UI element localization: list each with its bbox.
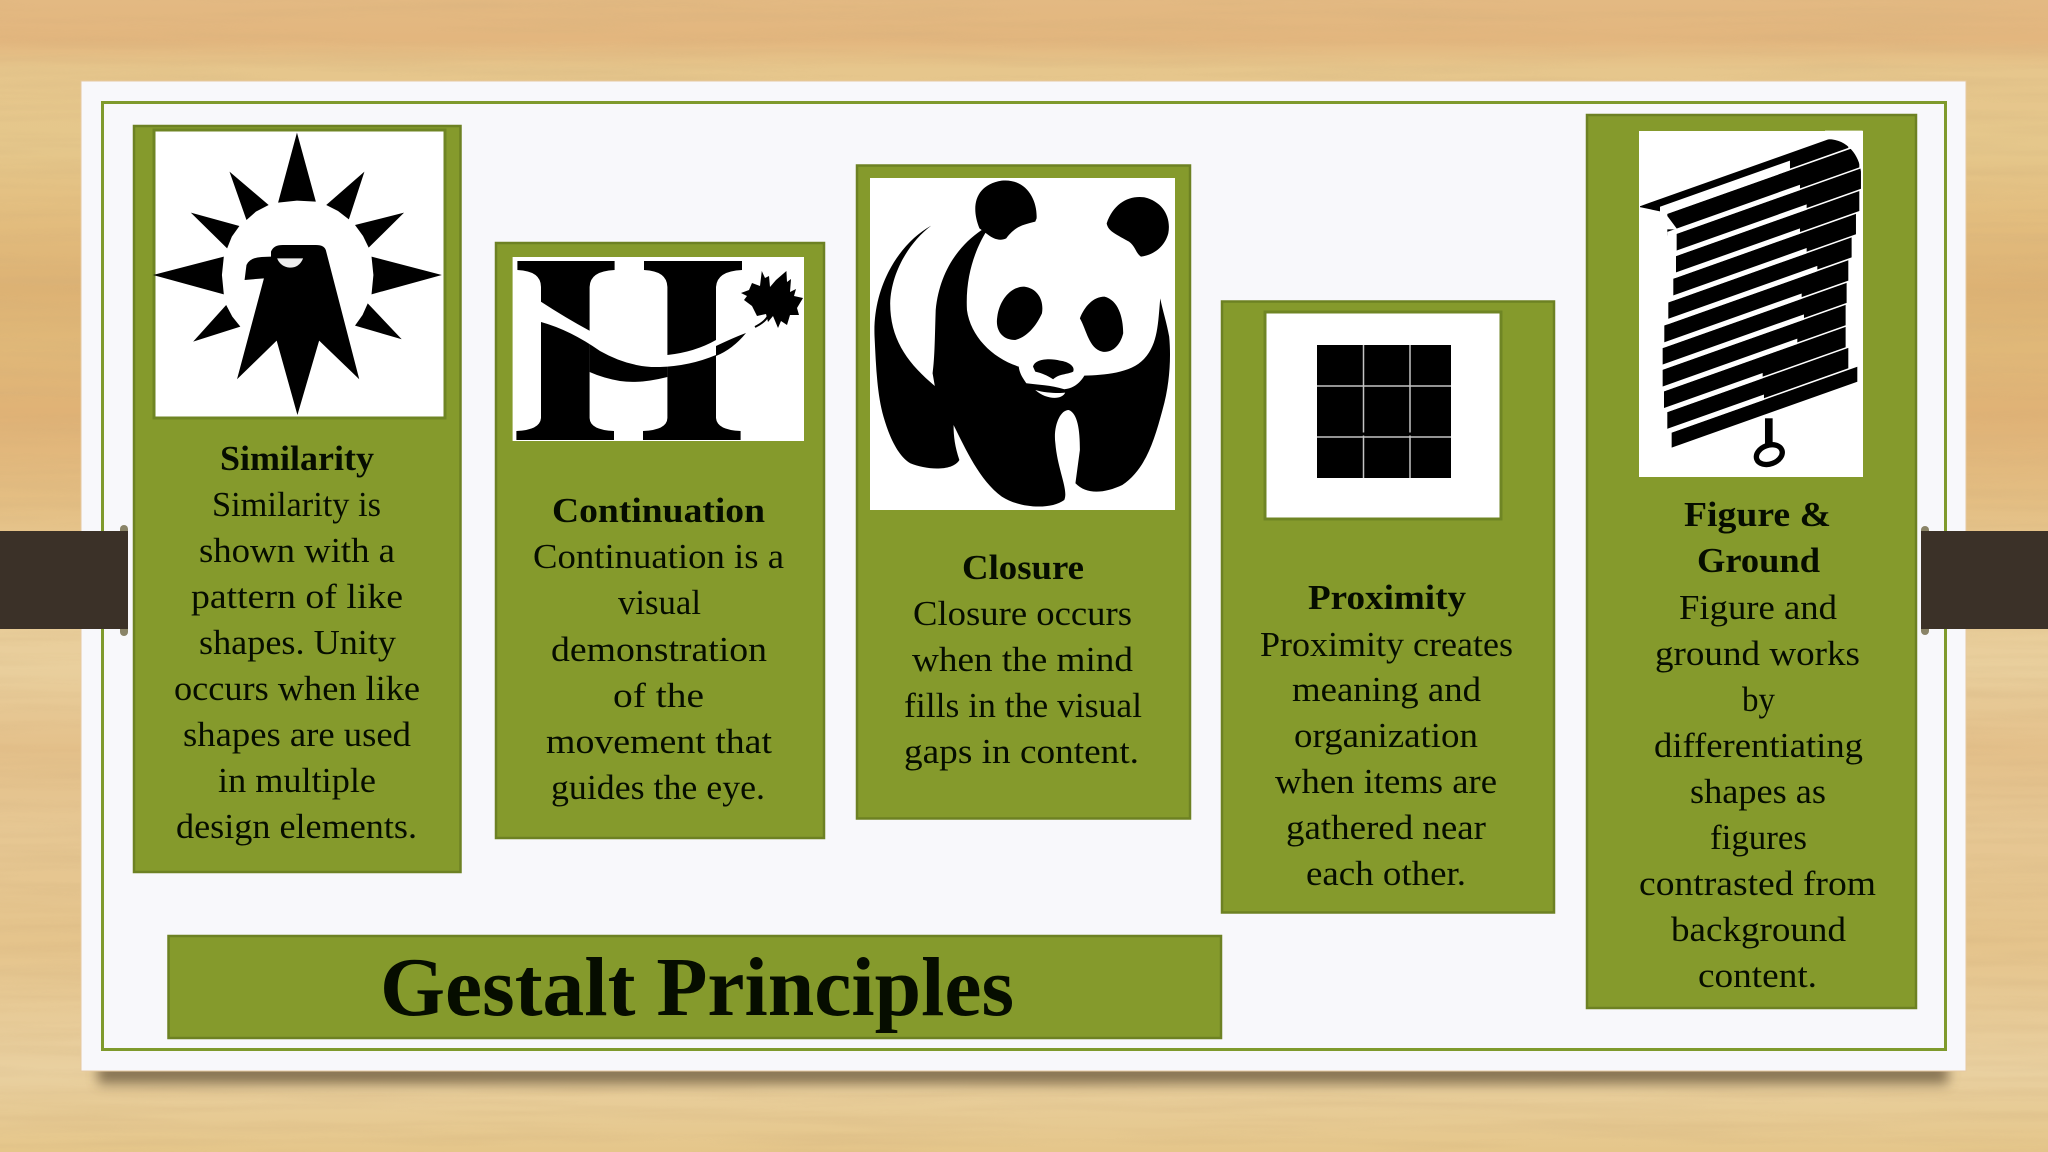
text: similarity description: shapes are used <box>183 715 412 754</box>
heading: figure and ground: Ground <box>1697 541 1821 580</box>
text: closure description: when the mind <box>912 640 1134 679</box>
text: continuation description: visual <box>618 583 701 622</box>
text: figure and ground description: ground works <box>1655 634 1860 673</box>
text: similarity description: shown with a <box>199 531 395 570</box>
text: proximity description: each other. <box>1306 854 1466 893</box>
image: H logo with maple leaf <box>513 257 804 441</box>
text: proximity description: when items are <box>1275 762 1497 801</box>
text: continuation description: movement that <box>546 722 772 761</box>
panel: figure and ground <box>1587 115 1916 1008</box>
text: continuation description: of the <box>613 676 704 715</box>
text: proximity description: organization <box>1294 716 1478 755</box>
text: figure and ground description <box>1639 588 1876 995</box>
heading: proximity: Proximity <box>1308 578 1467 617</box>
left dark strap <box>0 525 128 636</box>
text: similarity description <box>174 485 420 846</box>
panel: proximity <box>1222 302 1554 912</box>
text: proximity description: gathered near <box>1286 808 1486 847</box>
heading: figure and ground <box>1684 495 1831 580</box>
text: closure description: gaps in content. <box>904 732 1139 771</box>
text: similarity description: Similarity is <box>212 485 381 524</box>
text: proximity description: Proximity creates <box>1260 625 1513 664</box>
image: grid of squares <box>1265 312 1501 519</box>
inner green frame <box>102 102 1946 1050</box>
text: closure description <box>904 594 1142 771</box>
panel: closure <box>857 166 1190 818</box>
text: figure and ground description: shapes as <box>1690 772 1826 811</box>
text: similarity description: design elements. <box>176 807 417 846</box>
text: similarity description: pattern of like <box>191 577 403 616</box>
title: Gestalt Principles <box>380 941 1014 1034</box>
title banner <box>168 936 1221 1038</box>
heading: similarity: Similarity <box>220 439 375 478</box>
text: proximity description: meaning and <box>1292 670 1482 709</box>
text: similarity description: shapes. Unity <box>199 623 397 662</box>
text: similarity description: in multiple <box>218 761 376 800</box>
text: continuation description <box>533 537 784 807</box>
text: continuation description: demonstration <box>551 630 767 669</box>
text: figure and ground description: figures <box>1710 818 1807 857</box>
text: similarity description: occurs when like <box>174 669 420 708</box>
panel: continuation <box>496 243 824 838</box>
text: proximity description <box>1260 625 1513 893</box>
heading: continuation: Continuation <box>552 491 765 530</box>
right dark strap <box>1921 526 2048 635</box>
text: figure and ground description: contrasted from <box>1639 864 1876 903</box>
text: figure and ground description: by <box>1742 680 1775 719</box>
heading: closure: Closure <box>962 548 1084 587</box>
text: figure and ground description: content. <box>1698 956 1817 995</box>
text: figure and ground description: Figure and <box>1679 588 1838 627</box>
panel: similarity <box>134 126 460 872</box>
text: continuation description: Continuation is a <box>533 537 784 576</box>
text: figure and ground description: background <box>1671 910 1847 949</box>
text: continuation description: guides the eye. <box>551 768 765 807</box>
text: closure description: fills in the visual <box>904 686 1142 725</box>
text: figure and ground description: differentiating <box>1654 726 1863 765</box>
text: closure description: Closure occurs <box>913 594 1132 633</box>
image: window blind <box>1639 128 1863 477</box>
heading: figure and ground: Figure & <box>1684 495 1831 534</box>
slide shadow <box>98 1062 1948 1084</box>
image: panda <box>870 178 1175 510</box>
white slide card <box>81 81 1966 1071</box>
image: eagle and sun <box>153 130 445 418</box>
